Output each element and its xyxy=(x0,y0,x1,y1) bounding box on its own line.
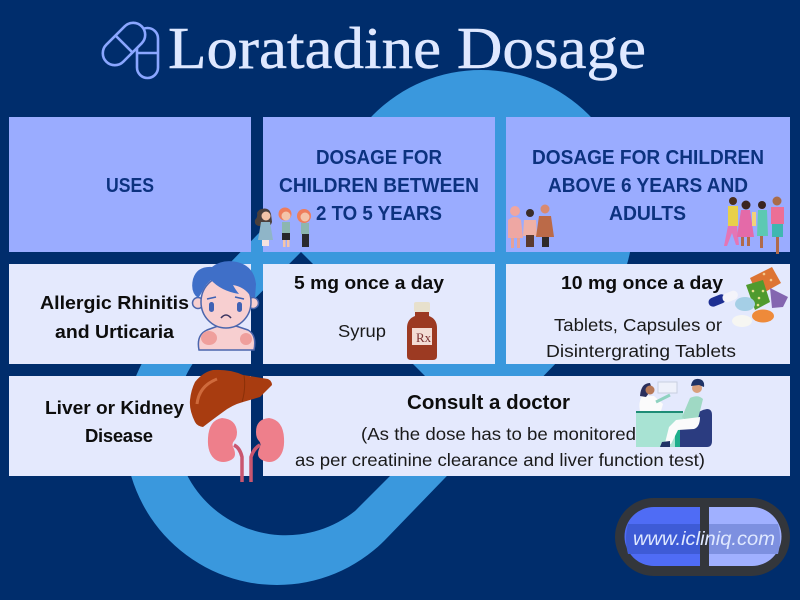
panel: consult a doctor: as per creatinine clearance and liver function test) xyxy=(295,450,705,470)
panel: liver or kidney disease xyxy=(9,376,251,476)
panel: liver or kidney disease: Liver or Kidney xyxy=(45,397,185,418)
panel: dosage above 6 years header: ADULTS xyxy=(609,203,686,225)
panel: allergic rhinitis: and Urticaria xyxy=(55,321,175,342)
panel: 5 mg dose xyxy=(263,264,495,364)
panel: 10 mg dose: 10 mg once a day xyxy=(561,272,724,293)
title: Loratadine Dosage xyxy=(168,15,646,81)
panel: dosage above 6 years header: ABOVE 6 YEARS AND xyxy=(548,175,748,197)
icon: adults group right xyxy=(724,196,784,254)
panel: consult a doctor: (As the dose has to be monitored xyxy=(361,424,636,444)
panel: dosage for children 2 to 5 header: DOSAGE FOR xyxy=(316,147,443,169)
panel: dosage for children 2 to 5 header: CHILDREN BETWEEN xyxy=(279,175,479,197)
panel: liver or kidney disease: Disease xyxy=(85,425,153,446)
title icon: capsules xyxy=(98,18,158,78)
icon: syrup bottle xyxy=(407,302,437,360)
panel: 10 mg dose: Disintergrating Tablets xyxy=(546,341,736,361)
panel: 10 mg dose xyxy=(506,264,790,364)
panel: dosage above 6 years header: DOSAGE FOR CHILDREN xyxy=(532,147,764,169)
panel: consult a doctor: Consult a doctor xyxy=(407,392,570,414)
icon: boy with rash xyxy=(192,261,258,350)
icon: liver xyxy=(190,370,272,427)
panel: dosage for children 2 to 5 header: 2 TO 5 YEARS xyxy=(316,203,442,225)
icon: medicine pills and blisters xyxy=(707,267,788,327)
icon: adults group left xyxy=(508,204,554,248)
logo: iCliniq capsule: www.icliniq.com xyxy=(633,529,775,550)
panel: dosage for children 2 to 5 header xyxy=(263,117,495,252)
background capsule shape xyxy=(125,70,633,585)
icon: doctor and patient xyxy=(636,379,712,447)
panel: allergic rhinitis: Allergic Rhinitis xyxy=(40,292,189,313)
panel: 5 mg dose: Syrup xyxy=(338,321,386,341)
panel: uses header xyxy=(9,117,251,252)
logo: iCliniq capsule xyxy=(615,498,790,576)
icon: children group xyxy=(255,208,311,247)
panel: dosage above 6 years header xyxy=(506,117,790,252)
panel: 10 mg dose: Tablets, Capsules or xyxy=(554,315,722,335)
panel: uses header: USES xyxy=(106,175,154,197)
icon: syrup bottle: Rx xyxy=(416,330,432,345)
panel: allergic rhinitis xyxy=(9,264,251,364)
icon: kidneys xyxy=(208,418,284,482)
panel: 5 mg dose: 5 mg once a day xyxy=(294,272,445,293)
panel: consult a doctor xyxy=(263,376,790,476)
